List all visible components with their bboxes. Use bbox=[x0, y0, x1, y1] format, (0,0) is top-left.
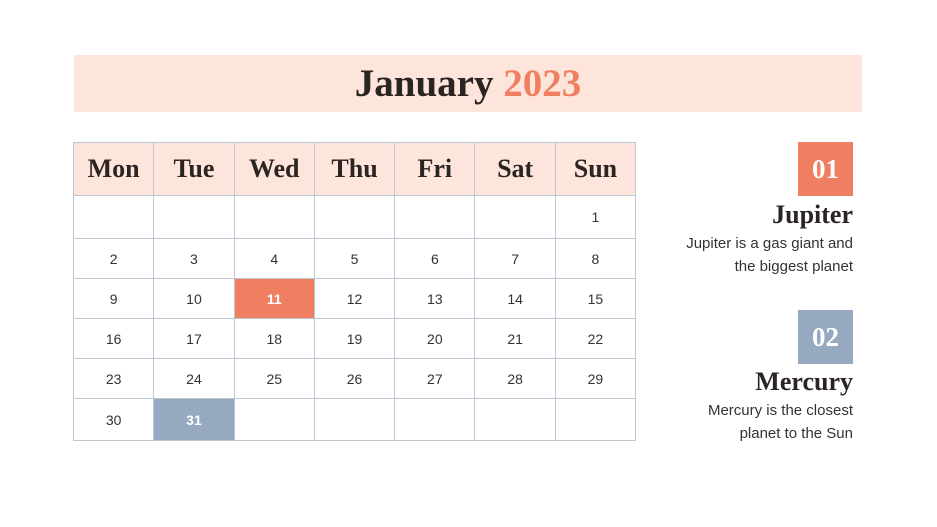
calendar: Tue bbox=[173, 154, 214, 183]
badge 01: 01 bbox=[812, 154, 839, 184]
calendar: 12 bbox=[347, 290, 362, 306]
calendar: 23 bbox=[106, 370, 121, 386]
heading Mercury: Mercury bbox=[755, 367, 853, 396]
heading Jupiter: Jupiter bbox=[772, 200, 853, 229]
calendar: 19 bbox=[347, 330, 362, 346]
calendar: Wed bbox=[249, 154, 300, 183]
calendar: 24 bbox=[186, 370, 202, 386]
calendar: 31 bbox=[186, 412, 202, 428]
title bar bbox=[74, 55, 862, 112]
calendar: 9 bbox=[110, 290, 118, 306]
calendar: 3 bbox=[190, 250, 198, 266]
badge 01 bbox=[798, 142, 853, 196]
calendar: 13 bbox=[427, 290, 443, 306]
calendar: 26 bbox=[347, 370, 362, 386]
calendar: 29 bbox=[588, 370, 603, 386]
calendar: 22 bbox=[588, 330, 603, 346]
calendar: 11 bbox=[267, 290, 282, 306]
calendar: 27 bbox=[427, 370, 443, 386]
badge 02 bbox=[798, 310, 853, 364]
calendar: Fri bbox=[418, 154, 452, 183]
calendar: 25 bbox=[266, 370, 282, 386]
badge 02: 02 bbox=[812, 322, 839, 352]
calendar: 6 bbox=[431, 250, 439, 266]
calendar: 10 bbox=[186, 290, 202, 306]
text Jupiter: Jupiter is a gas giant and bbox=[686, 235, 853, 252]
calendar: 18 bbox=[266, 330, 282, 346]
calendar: Mon bbox=[88, 154, 140, 183]
calendar bbox=[73, 142, 636, 441]
calendar: 14 bbox=[507, 290, 523, 306]
text Mercury: Mercury is the closest bbox=[708, 402, 853, 419]
title bar: January 2023 bbox=[355, 62, 581, 105]
calendar: 17 bbox=[186, 330, 202, 346]
text Mercury: planet to the Sun bbox=[740, 425, 853, 442]
calendar: 8 bbox=[592, 250, 599, 266]
calendar: 21 bbox=[507, 330, 523, 346]
calendar: 20 bbox=[427, 330, 443, 346]
calendar: 5 bbox=[351, 250, 358, 266]
text Jupiter bbox=[686, 235, 853, 275]
calendar: 16 bbox=[106, 330, 121, 346]
text Mercury bbox=[708, 402, 853, 442]
calendar: Thu bbox=[331, 154, 378, 183]
calendar: 28 bbox=[507, 370, 523, 386]
calendar: 30 bbox=[106, 412, 121, 428]
calendar: 7 bbox=[511, 250, 519, 266]
calendar: 2 bbox=[110, 250, 118, 266]
text Jupiter: the biggest planet bbox=[735, 258, 853, 275]
calendar: Sat bbox=[497, 154, 533, 183]
calendar: 4 bbox=[270, 250, 278, 266]
calendar: Sun bbox=[574, 154, 617, 183]
calendar: 1 bbox=[592, 209, 599, 225]
calendar: 15 bbox=[588, 290, 603, 306]
